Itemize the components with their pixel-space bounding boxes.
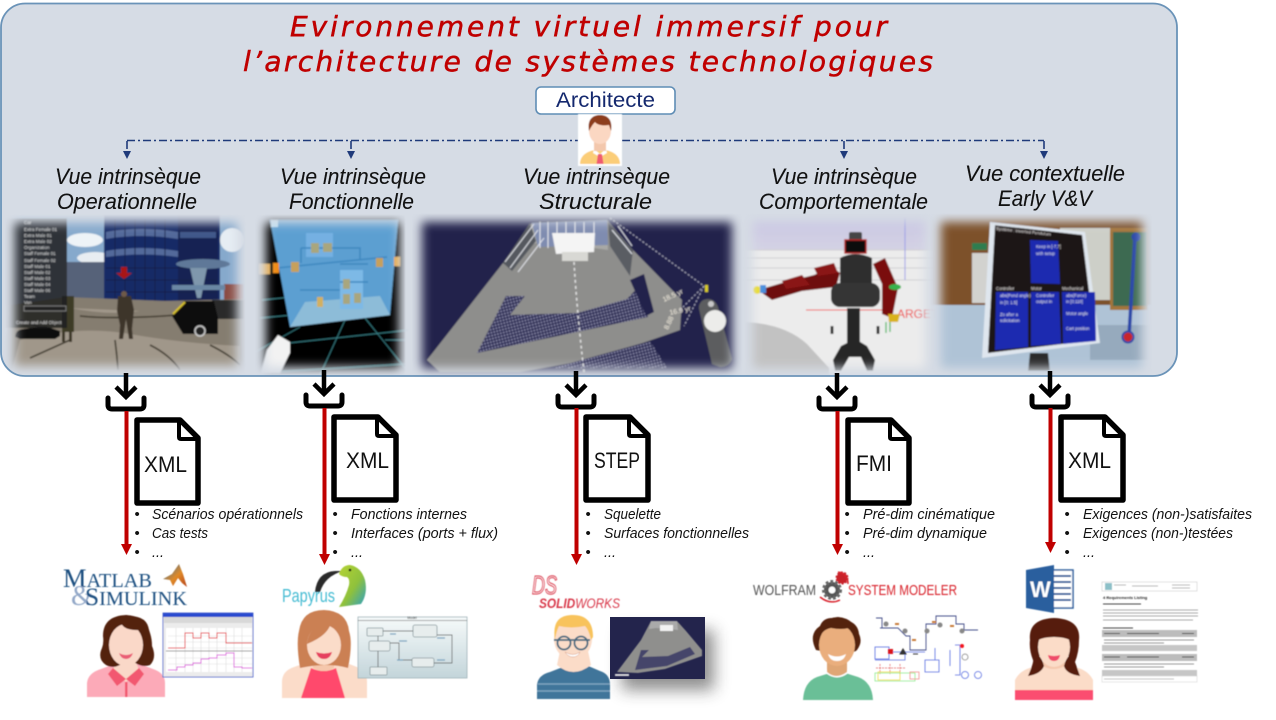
- heading: Vue contextuelle Early V&V: [965, 161, 1125, 211]
- image: contextual requirement board: abs(Pend angle): [1000, 293, 1031, 298]
- avatar: curly haired man with green shirt: [803, 617, 873, 700]
- icon: XML document: [334, 417, 396, 500]
- flow: STEP structural export: [558, 371, 749, 565]
- chart: Simulink step responses window: [163, 613, 253, 677]
- diagram: Papyrus internal block diagram: Model: [407, 616, 417, 620]
- list: exported data: •: [1064, 525, 1070, 542]
- title: l’architecture de systèmes technologiques: [243, 45, 933, 78]
- list: exported data: •: [844, 525, 850, 542]
- heading: Vue intrinsèque Fonctionnelle: Vue intrinsèque: [280, 164, 426, 189]
- image: contextual requirement board: output in: [1036, 299, 1053, 304]
- heading: Vue intrinsèque Structurale: Structurale: [539, 189, 652, 214]
- list: exported data: •: [1064, 544, 1070, 561]
- avatar: blond man with glasses and striped shirt: [537, 615, 610, 699]
- image: contextual requirement board: Mechanical: [1062, 286, 1083, 291]
- image: contextual requirement board: with setup: [1036, 251, 1056, 256]
- title: [243, 10, 933, 78]
- image: SolidWorks room model with shadow: [610, 617, 714, 690]
- icon: XML document: [137, 420, 198, 503]
- image: contextual requirement board: Controller: [996, 286, 1015, 291]
- title: Evironnement virtuel immersif pour: [290, 10, 888, 43]
- image: structural room model in VR: [412, 214, 742, 378]
- list: exported data: •: [586, 525, 591, 542]
- flow: XML functional export: [306, 370, 498, 565]
- list: exported data: •: [332, 506, 338, 523]
- list: exported data: •: [1064, 506, 1070, 523]
- list: exported data: •: [844, 544, 850, 561]
- arrow: red flow to tool: [1045, 408, 1056, 553]
- heading: Vue intrinsèque Operationnelle: [55, 164, 201, 214]
- image: contextual requirement board: abs(Force): [1066, 293, 1087, 298]
- list: exported data: •: [134, 525, 140, 542]
- image: contextual requirement board: Cart position: [1066, 326, 1090, 331]
- list: exported data: ...: [863, 545, 875, 561]
- heading: Vue intrinsèque Comportementale: Comportementale: [759, 189, 928, 214]
- logo: Matlab & Simulink: MATLAB: [63, 564, 152, 593]
- image: contextual requirement board: Zo after a: [1000, 312, 1019, 317]
- heading: Vue intrinsèque Structurale: [523, 164, 670, 214]
- list: exported data: [332, 506, 498, 561]
- image: structural room model in VR: 18.5 yr: [662, 288, 685, 304]
- image: contextual requirement board: in [0;110]: [1066, 299, 1083, 304]
- icon: STEP document: [586, 417, 648, 500]
- image: operational city scene: Staff Male 04: [24, 282, 51, 287]
- image: behavioural robot simulation: [750, 218, 930, 372]
- image: operational city scene: Staff Male 01: [24, 264, 51, 269]
- avatar: woman with auburn hair and red dress: [282, 610, 367, 698]
- logo: Matlab & Simulink: SIMULINK: [85, 584, 188, 611]
- logo: Papyrus: [282, 565, 366, 607]
- icon: STEP document: STEP: [594, 448, 640, 473]
- list: exported data: Squelette: [604, 507, 661, 523]
- flow: FMI behavioural export: [819, 373, 995, 561]
- icon: download tray: [1032, 371, 1068, 407]
- heading: Vue intrinsèque Fonctionnelle: [280, 164, 426, 214]
- icon: Microsoft Word: [1026, 565, 1073, 613]
- list: exported data: •: [586, 506, 591, 523]
- image: operational city scene: Car: [24, 220, 32, 225]
- image: contextual requirement board: Motor angle: [1066, 311, 1089, 316]
- list: exported data: Exigences (non-)testées: [1083, 526, 1233, 542]
- list: exported data: Interfaces (ports + flux): [351, 526, 498, 542]
- logo: Matlab & Simulink: [63, 564, 188, 612]
- list: exported data: •: [332, 544, 338, 561]
- arrow: red flow to tool: [121, 411, 132, 555]
- list: exported data: [134, 506, 303, 561]
- logo: Wolfram System Modeler: WOLFRAM: [753, 582, 816, 599]
- icon: architect avatar: [578, 114, 622, 166]
- list: exported data: [1064, 506, 1252, 561]
- logo: SolidWorks: SOLIDWORKS: [539, 596, 620, 611]
- list: exported data: •: [134, 506, 140, 523]
- heading: Vue intrinsèque Comportementale: [759, 164, 928, 214]
- logo: Wolfram System Modeler: SYSTEM MODELER: [848, 582, 957, 599]
- list: exported data: Scénarios opérationnels: [152, 507, 303, 523]
- document: requirements listing: [1102, 582, 1198, 682]
- icon: XML document: XML: [1068, 448, 1111, 473]
- logo: Papyrus: Papyrus: [282, 586, 335, 606]
- list: exported data: [844, 506, 995, 561]
- image: functional block diagram in VR: [250, 215, 410, 375]
- image: operational city scene: [0, 215, 245, 376]
- avatar: woman with dark hair and pink shirt: [87, 615, 165, 697]
- image: structural room model in VR: 8.88: [663, 315, 676, 331]
- image: operational city scene: Staff Male 02: [24, 270, 51, 275]
- heading: Vue intrinsèque Comportementale: Vue intrinsèque: [771, 164, 917, 189]
- list: exported data: ...: [1083, 545, 1095, 561]
- list: exported data: ...: [351, 545, 363, 561]
- avatar: woman with fringe and red top: [1015, 618, 1093, 700]
- image: operational city scene: Staff Male 06: [24, 288, 51, 293]
- arrow: red flow to tool: [832, 411, 843, 555]
- label: Architecte: Architecte: [556, 89, 655, 112]
- image: operational city scene: Create and Add Object: [16, 320, 62, 325]
- image: operational city scene: Extra Male 02: [24, 239, 52, 244]
- diagram: System Modeler schematic: [875, 616, 982, 681]
- image: operational city scene: Staff Female 01: [24, 251, 56, 256]
- image: operational city scene: Extra Female 01: [24, 227, 58, 232]
- image: structural room model in VR: 16.9 yr: [669, 306, 692, 317]
- list: exported data: Exigences (non-)satisfaites: [1083, 507, 1252, 523]
- list: exported data: •: [134, 544, 140, 561]
- flow: XML contextual export: [1032, 371, 1252, 561]
- list: exported data: Surfaces fonctionnelles: [604, 526, 749, 542]
- icon: download tray: [306, 370, 342, 406]
- icon: FMI document: [848, 420, 909, 503]
- list: exported data: Cas tests: [152, 526, 208, 542]
- logo: Matlab & Simulink: &: [71, 581, 93, 612]
- image: contextual requirement board: Controller: [1036, 293, 1055, 298]
- arrow: red flow to tool: [319, 408, 330, 565]
- image: contextual requirement board: Keep in [-7,7]: [1036, 244, 1061, 249]
- document: requirements listing: 4 Requirements Listing: [1103, 595, 1148, 600]
- icon: XML document: [1061, 417, 1123, 500]
- image: contextual requirement board: in [0; 1.5]: [1000, 300, 1017, 305]
- image: contextual requirement board: Système : Inverted Pendulum: [996, 226, 1052, 237]
- panel: immersive environment background: [1, 4, 1177, 376]
- list: exported data: •: [844, 506, 850, 523]
- list: exported data: •: [332, 525, 338, 542]
- image: operational city scene: Extra Male 01: [24, 233, 52, 238]
- list: exported data: Pré-dim cinématique: [863, 507, 995, 523]
- dash-dot distribution line with arrows: [123, 140, 1048, 159]
- diagram: Papyrus internal block diagram: [358, 616, 467, 678]
- logo: SolidWorks: [532, 570, 620, 611]
- image: contextual requirement board: Motor: [1031, 286, 1042, 291]
- image: operational city scene: Van: [24, 300, 32, 305]
- image: operational city scene: Organization: [24, 245, 50, 250]
- heading: Vue intrinsèque Structurale: Vue intrinsèque: [523, 164, 670, 189]
- flow: XML operational export: [108, 373, 303, 561]
- arrow: red flow to tool: [571, 408, 582, 565]
- icon: FMI document: FMI: [856, 451, 892, 476]
- icon: Microsoft Word: W: [1030, 577, 1051, 602]
- icon: download tray: [558, 371, 594, 407]
- image: operational city scene: Staff Male 03: [24, 276, 51, 281]
- logo: Wolfram System Modeler: [753, 572, 957, 602]
- heading: Vue contextuelle Early V&V: Early V&V: [998, 186, 1094, 211]
- heading: Vue intrinsèque Operationnelle: Vue intrinsèque: [55, 164, 201, 189]
- list: exported data: Fonctions internes: [351, 507, 467, 523]
- label: Architecte: [536, 87, 675, 114]
- image: operational city scene: Team: [24, 294, 35, 299]
- icon: XML document: XML: [346, 448, 389, 473]
- list: exported data: [586, 506, 749, 561]
- image: contextual requirement board: [930, 214, 1152, 380]
- heading: Vue intrinsèque Fonctionnelle: Fonctionnelle: [289, 189, 414, 214]
- image: operational city scene: Staff Female 02: [24, 258, 56, 263]
- icon: XML document: XML: [144, 452, 187, 477]
- icon: download tray: [108, 373, 144, 409]
- heading: Vue intrinsèque Operationnelle: Operationnelle: [57, 189, 197, 214]
- list: exported data: Pré-dim dynamique: [863, 526, 987, 542]
- list: exported data: ...: [152, 545, 164, 561]
- heading: Vue contextuelle Early V&V: Vue contextuelle: [965, 161, 1125, 186]
- logo: SolidWorks: DS: [532, 570, 557, 600]
- list: exported data: •: [586, 544, 591, 561]
- image: behavioural robot simulation: ARGET: [897, 307, 939, 321]
- icon: download tray: [819, 373, 855, 409]
- list: exported data: ...: [604, 545, 616, 561]
- image: contextual requirement board: solicitation: [1000, 318, 1020, 323]
